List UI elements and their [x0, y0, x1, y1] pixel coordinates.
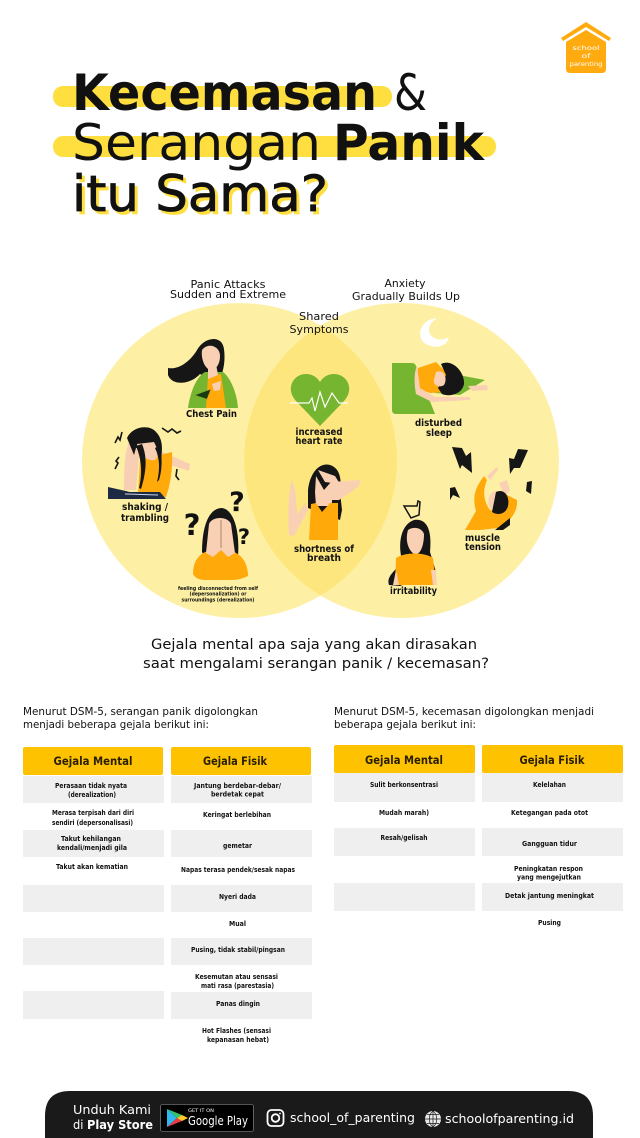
icons: question marks: ? — [184, 508, 200, 542]
mental symptoms list: Perasaan tidak nyata — [55, 782, 127, 790]
venn heading: shared symptoms: Symptoms — [290, 324, 348, 336]
badge: google play — [160, 1104, 254, 1132]
physical symptoms list: Pusing, tidak stabil/pingsan — [191, 946, 285, 954]
physical symptoms list — [505, 781, 595, 927]
header: gejala mental: Gejala Mental — [365, 753, 443, 767]
mental symptoms list: Resah/gelisah — [380, 834, 428, 842]
header: gejala fisik: Gejala Fisik — [520, 753, 585, 767]
header: gejala fisik — [482, 745, 623, 773]
play store prompt: di Play Store — [73, 1118, 153, 1132]
label: disturbed sleep: sleep — [426, 428, 452, 439]
label: feeling disconnected: (depersonalization) or — [190, 592, 247, 598]
mental symptoms list — [370, 781, 438, 842]
label: muscle tension — [465, 533, 501, 553]
play store prompt — [73, 1103, 153, 1132]
physical symptoms list: Peningkatan respon — [514, 865, 583, 873]
physical symptoms list: Detak jantung meningkat — [505, 892, 595, 900]
footer bar — [45, 1091, 593, 1138]
physical symptoms list: Hot Flashes (sensasi — [202, 1027, 271, 1035]
header: gejala fisik: Gejala Fisik — [203, 754, 267, 768]
illustration: disconnected — [193, 508, 248, 580]
mental symptoms list: sendiri (depersonalisasi) — [52, 819, 133, 827]
physical symptoms list: Napas terasa pendek/sesak napas — [181, 866, 295, 874]
mental symptoms list: Mudah marah) — [379, 809, 429, 817]
website address: schoolofparenting.id — [445, 1111, 574, 1126]
title: Panik — [333, 114, 486, 172]
label: shortness of breath: shortness of — [294, 544, 355, 555]
label: increased heart rate: heart rate — [296, 436, 342, 447]
label: shaking / trembling — [121, 502, 169, 524]
physical symptoms list: Mual — [229, 920, 246, 928]
intro text: panic: menjadi beberapa gejala berikut ini: — [23, 719, 209, 731]
intro text: anxiety — [334, 706, 594, 731]
logo: School of Parenting: parenting — [570, 60, 602, 68]
header: gejala mental: Gejala Mental — [54, 754, 132, 768]
physical symptoms list: kepanasan hebat) — [207, 1036, 269, 1044]
mental symptoms list: Sulit berkonsentrasi — [370, 781, 438, 789]
illustration: shaking — [108, 427, 190, 499]
mental symptoms list — [52, 782, 134, 871]
intro text: anxiety: Menurut DSM-5, kecemasan digolongkan menjadi — [334, 706, 594, 718]
title: itu Sama? — [72, 165, 328, 223]
icon: crescent moon — [421, 319, 448, 346]
intro text: anxiety: beberapa gejala berikut ini: — [334, 719, 476, 731]
label: disturbed sleep: disturbed — [415, 418, 462, 429]
venn diagram — [82, 303, 559, 618]
question heading: Gejala mental apa saja yang akan dirasakan — [151, 637, 477, 653]
icon: globe — [425, 1111, 441, 1127]
mental symptoms list: Takut kehilangan — [61, 835, 121, 843]
physical symptoms list: berdetak cepat — [211, 790, 265, 798]
label: shortness of breath — [294, 544, 355, 564]
label: feeling disconnected: surroundings (derealization) — [182, 598, 254, 604]
physical symptoms list: Kesemutan atau sensasi — [195, 973, 278, 981]
icon: instagram — [268, 1110, 284, 1126]
logo: School of Parenting: school — [572, 44, 600, 52]
logo: School of Parenting: of — [582, 52, 592, 60]
label: shortness of breath: breath — [307, 553, 341, 564]
row backgrounds — [23, 776, 312, 1019]
intro text: panic — [23, 706, 258, 731]
label: disturbed sleep — [415, 418, 462, 439]
physical symptoms list: mati rasa (parestasia) — [201, 982, 274, 990]
header: gejala fisik — [171, 747, 311, 775]
mental symptoms list: Merasa terpisah dari diri — [52, 809, 134, 817]
label: irritability: irritability — [390, 586, 438, 597]
illustration: shortness of breath — [288, 464, 361, 540]
label: chest pain: Chest Pain — [186, 409, 237, 420]
physical symptoms list — [181, 782, 295, 1044]
question heading — [143, 637, 489, 672]
icons: question marks: ? — [238, 525, 250, 549]
venn heading: anxiety: Anxiety — [384, 278, 426, 290]
physical symptoms list: yang mengejutkan — [517, 874, 581, 882]
instagram handle: school_of_parenting — [290, 1110, 415, 1125]
label: muscle tension: muscle — [465, 533, 500, 544]
mental symptoms list: (derealization) — [68, 791, 116, 799]
logo: School of Parenting — [561, 22, 611, 73]
icons: question marks — [184, 487, 250, 549]
venn heading: shared symptoms — [290, 311, 348, 336]
illustration: disturbed sleep — [392, 362, 488, 414]
badge: google play: Google Play — [188, 1114, 248, 1128]
illustration: chest pain — [168, 339, 238, 408]
mental symptoms list: Takut akan kematian — [56, 863, 128, 871]
venn heading: panic attacks — [170, 279, 286, 301]
physical symptoms list: Panas dingin — [216, 1000, 260, 1008]
label: increased heart rate — [296, 427, 342, 447]
label: shaking / trembling: trambling — [121, 513, 169, 524]
mental symptoms list: kendali/menjadi gila — [57, 844, 127, 852]
header: gejala mental — [334, 745, 475, 773]
badge: google play: GET IT ON — [188, 1108, 214, 1114]
icons: question marks: ? — [229, 487, 245, 518]
illustration: muscle tension — [450, 447, 532, 530]
illustration: irritability — [388, 501, 437, 586]
title: Serangan — [72, 114, 321, 172]
physical symptoms list: Jantung berdebar-debar/ — [193, 782, 281, 790]
header: gejala mental — [23, 747, 163, 775]
intro text: panic: Menurut DSM-5, serangan panik digolongkan — [23, 706, 258, 718]
physical symptoms list: Gangguan tidur — [522, 840, 577, 848]
label: feeling disconnected — [178, 586, 259, 604]
icon: heart with pulse — [290, 374, 349, 426]
physical symptoms list: gemetar — [223, 842, 252, 850]
label: muscle tension: tension — [465, 542, 501, 553]
play store prompt: Unduh Kami — [73, 1103, 151, 1117]
label: feeling disconnected: feeling disconnected from self — [178, 586, 259, 592]
title — [53, 64, 496, 226]
table: anxiety symptoms — [334, 745, 623, 927]
title: itu Sama? — [75, 168, 331, 226]
label: shaking / trembling: shaking / — [122, 502, 168, 513]
physical symptoms list: Kelelahan — [533, 781, 566, 789]
physical symptoms list: Keringat berlebihan — [203, 811, 271, 819]
physical symptoms list: Nyeri dada — [219, 893, 256, 901]
question heading: saat mengalami serangan panik / kecemasan? — [143, 656, 489, 672]
venn heading: anxiety — [352, 278, 460, 303]
venn heading: panic attacks: Sudden and Extreme — [170, 289, 286, 301]
venn heading: panic attacks: Panic Attacks — [190, 279, 266, 291]
title: Kecemasan — [72, 64, 377, 122]
label: increased heart rate: increased — [296, 427, 342, 438]
row backgrounds — [334, 773, 623, 911]
title: & — [394, 64, 427, 122]
venn heading: shared symptoms: Shared — [299, 311, 339, 323]
physical symptoms list: Ketegangan pada otot — [511, 809, 589, 817]
table: panic symptoms — [23, 747, 312, 1044]
venn heading: anxiety: Gradually Builds Up — [352, 291, 460, 303]
physical symptoms list: Pusing — [538, 919, 561, 927]
